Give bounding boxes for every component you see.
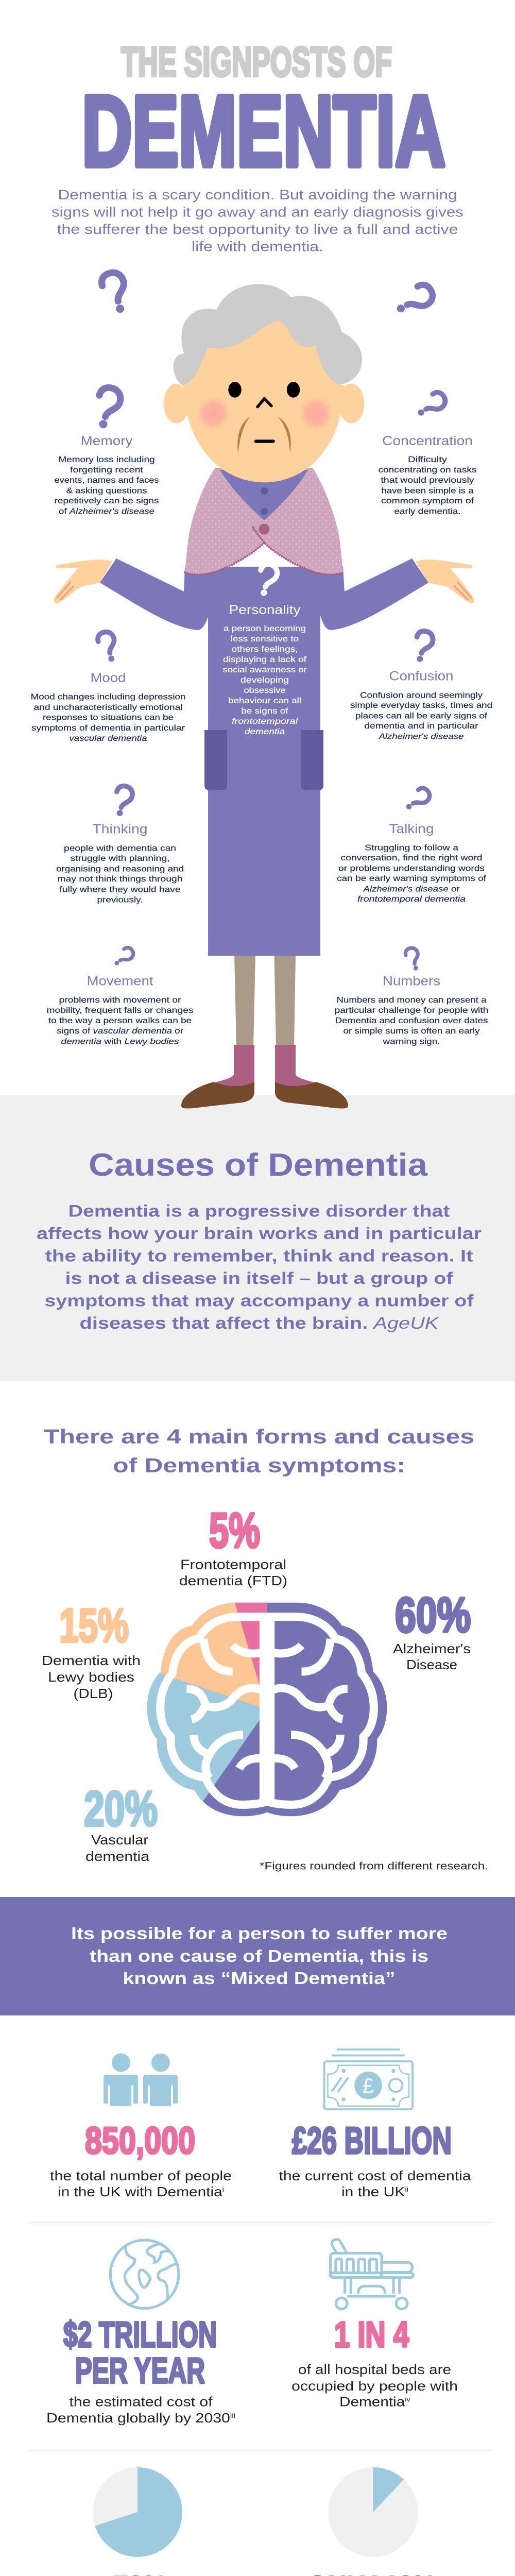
stat: 20 percent vascular: Vascular <box>91 1832 148 1848</box>
icon: question mark thinking <box>111 784 134 818</box>
footnote: figures rounded: *Figures rounded from different research. <box>260 1861 488 1872</box>
text: personality: developing <box>241 676 289 685</box>
text: causes paragraph: Dementia is a progressive disorder that <box>68 1202 450 1221</box>
text: memory: events, names and faces <box>55 476 159 485</box>
dress <box>184 567 345 956</box>
stat: 2 trillion: PER YEAR <box>75 2350 205 2391</box>
stat: 850,000: in the UK with Dementia <box>58 2184 201 2199</box>
stat: 850,000: 850,000 <box>85 2120 195 2162</box>
text: talking: Alzheimer's disease or <box>363 885 460 894</box>
text: numbers: or simple sums is often an early <box>343 1027 480 1036</box>
stat: 5 percent frontotemporal: 5% <box>209 1503 260 1558</box>
stat: 2 trillion: the estimated cost of <box>69 2394 213 2410</box>
stat: 1 in 4: occupied by people with <box>291 2378 458 2394</box>
text: mood: Mood <box>91 671 126 685</box>
text: personality: less sensitive to <box>231 635 299 643</box>
text: thinking: people with dementia can <box>64 844 176 853</box>
left arm <box>100 558 209 630</box>
text: mood <box>31 671 185 743</box>
stat: 2 trillion <box>46 2314 235 2426</box>
stat: 1 in 4: 1 IN 4 <box>334 2314 409 2354</box>
icon: question mark numbers <box>404 946 422 972</box>
heading: 4 main forms <box>44 1426 474 1477</box>
head <box>164 284 364 482</box>
heading: causes of dementia: Causes of Dementia <box>89 1147 428 1183</box>
stat: 15 percent lewy bodies: (DLB) <box>73 1686 113 1701</box>
text: memory: repetitively can be signs <box>55 497 159 505</box>
icon: question mark memory <box>91 385 123 431</box>
text: memory <box>55 434 159 516</box>
icon: question mark mood <box>96 630 119 664</box>
text: thinking: previously. <box>97 896 143 905</box>
stat: 15 percent lewy bodies <box>42 1599 141 1701</box>
stat: 26 billion: £26 BILLION <box>292 2120 452 2162</box>
text: personality: social awareness or <box>222 666 307 674</box>
chart: pie 70 percent <box>93 2467 182 2557</box>
stat: 60 percent alzheimers: Alzheimer's <box>393 1641 471 1656</box>
text: concentration: Difficulty <box>408 455 447 464</box>
text: personality: behaviour can all <box>228 697 301 705</box>
text: thinking <box>56 822 184 905</box>
stat: 2 trillion: iii <box>230 2412 235 2419</box>
text: personality: a person becoming <box>224 624 306 633</box>
text: mood: symptoms of dementia in particular <box>31 724 185 733</box>
stat: 1 in 4: iv <box>405 2396 411 2403</box>
text: confusion: simple everyday tasks, times and <box>350 701 492 710</box>
text: thinking: fully where they would have <box>60 885 181 894</box>
text: movement: mobility, frequent falls or changes <box>46 1006 194 1015</box>
text: thinking: struggle with planning, <box>70 854 170 863</box>
icon: question mark confusion <box>411 630 435 664</box>
text: movement: Movement <box>87 974 153 988</box>
icon: question mark top left <box>99 270 131 316</box>
text: numbers: Numbers and money can present a <box>337 996 487 1005</box>
cardigan <box>185 468 343 575</box>
text: movement: signs of vascular dementia or <box>57 1027 184 1036</box>
text: concentration: early dementia. <box>394 507 460 516</box>
text: numbers <box>335 974 488 1046</box>
text: personality: Personality <box>229 603 301 617</box>
stat: 5 percent frontotemporal <box>179 1503 287 1588</box>
left hand <box>54 560 112 603</box>
stat: 2 trillion: $2 TRILLION <box>63 2314 217 2354</box>
stat: 15 percent lewy bodies: 15% <box>59 1599 129 1652</box>
stat: 5 percent frontotemporal: Frontotemporal <box>180 1557 286 1572</box>
stat: 26 billion: the current cost of dementia <box>279 2168 471 2183</box>
text: personality: obsessive <box>244 686 286 695</box>
text: concentration: that would previously <box>381 476 474 485</box>
panel: causes of dementia <box>0 1095 515 1381</box>
text: numbers: Dementia and confusion over dates <box>335 1016 488 1025</box>
text: talking: Struggling to follow a <box>365 844 458 853</box>
text: personality: be signs of <box>241 707 288 716</box>
panel: mixed dementia: than one cause of Dementia, this is <box>90 1946 428 1965</box>
figure: boots and shoes <box>181 1045 348 1108</box>
text: concentration: Concentration <box>382 434 473 448</box>
icon: question mark top right <box>392 281 436 319</box>
pockets <box>204 730 323 790</box>
icon: globe <box>110 2240 179 2309</box>
text: memory: forgetting recent <box>70 466 144 474</box>
stat: 60 percent alzheimers: Disease <box>406 1657 457 1672</box>
text: memory: of Alzheimer's disease <box>59 507 154 516</box>
text: personality: frontotemporal <box>232 717 298 726</box>
stat: 1 in 4 <box>291 2314 458 2410</box>
text: movement <box>46 974 194 1046</box>
text: talking: conversation, find the right word <box>341 854 482 862</box>
text: numbers: warning sign. <box>382 1038 440 1046</box>
text: memory: Memory loss including <box>59 455 154 464</box>
figure: elderly woman <box>54 284 474 1046</box>
text: mood: and uncharacteristically emotional <box>34 703 182 712</box>
stat: 15 percent lewy bodies: Dementia with <box>42 1653 141 1668</box>
text: causes paragraph <box>37 1202 482 1332</box>
text: talking <box>337 822 487 904</box>
stat: 60 percent alzheimers <box>393 1588 471 1672</box>
text: talking: frontotemporal dementia <box>357 895 466 904</box>
text: confusion: Alzheimer's disease <box>378 733 464 741</box>
text: numbers: particular challenge for people with <box>335 1006 488 1015</box>
text: thinking: organising and reasoning and <box>56 865 184 873</box>
stat: 26 billion <box>279 2120 471 2199</box>
text: talking: or problems understanding words <box>338 865 485 873</box>
panel: mixed dementia <box>0 1897 515 2015</box>
icon: banknote <box>324 2049 413 2109</box>
text: concentration <box>378 434 477 516</box>
panel: mixed dementia: known as “Mixed Dementia” <box>123 1969 396 1988</box>
heading: 4 main forms: There are 4 main forms and causes <box>44 1426 474 1448</box>
icon: question mark concentration <box>414 389 449 420</box>
stat: 1 in 4: Dementia <box>339 2394 397 2410</box>
stat: 2 trillion: Dementia globally by 2030 <box>46 2410 204 2426</box>
heading: 4 main forms: of Dementia symptoms: <box>113 1455 405 1477</box>
chart: brain pie <box>147 1602 387 1817</box>
stat: 26 billion: in the UK <box>341 2184 397 2199</box>
icon: two people <box>104 2054 178 2106</box>
stat: 20 percent vascular <box>84 1782 158 1864</box>
stat: 850,000: the total number of people <box>50 2168 232 2183</box>
icon: hospital bed <box>331 2239 413 2309</box>
text: thinking: may not think things through <box>58 875 182 884</box>
buttons <box>259 487 270 535</box>
text: memory: & asking questions <box>66 486 147 496</box>
text: concentration: common symptom of <box>381 497 474 505</box>
legs <box>234 956 296 1046</box>
right hand <box>416 560 474 603</box>
stat: 5 percent frontotemporal: dementia (FTD) <box>179 1573 287 1588</box>
text: numbers: Numbers <box>383 974 440 988</box>
text: movement: to the way a person walks can be <box>48 1016 192 1025</box>
stat: 1 in 4: of all hospital beds are <box>298 2362 451 2377</box>
text: confusion: Confusion around seemingly <box>360 691 483 700</box>
intro text: Dementia is a scary condition. But avoiding the warning <box>58 187 457 202</box>
collar <box>220 470 308 520</box>
intro text <box>52 187 464 255</box>
text: confusion: places can all be early signs of <box>355 712 488 720</box>
text: personality: others feelings, <box>232 645 298 654</box>
title <box>82 39 445 188</box>
stat: 850,000 <box>50 2120 232 2199</box>
stat: 15 percent lewy bodies: Lewy bodies <box>48 1669 134 1685</box>
text: talking: can be early warning symptoms of <box>337 874 487 883</box>
text: concentration: have been simple is a <box>381 486 474 496</box>
text: causes paragraph: symptoms that may accompany a number of <box>44 1292 474 1310</box>
intro text: signs will not help it go away and an early diagnosis gives <box>52 204 464 219</box>
text: concentration: concentrating on tasks <box>378 466 477 474</box>
icon: banknote: £ <box>363 2074 374 2097</box>
stat: 20 percent vascular: 20% <box>84 1782 158 1836</box>
icon: question mark personality <box>254 563 279 598</box>
text: mood: responses to situations can be <box>43 713 174 722</box>
right arm <box>320 558 428 630</box>
text: causes paragraph: is not a disease in itself – but a group of <box>65 1269 453 1287</box>
text: memory: Memory <box>80 434 133 448</box>
text: mood: Mood changes including depression <box>31 692 185 702</box>
panel: mixed dementia: Its possible for a person to suffer more <box>71 1924 448 1943</box>
text: personality <box>222 603 307 736</box>
stat: 60 percent alzheimers: 60% <box>395 1588 471 1642</box>
intro text: life with dementia. <box>192 239 323 255</box>
icon: question mark movement <box>111 945 136 969</box>
text: personality: displaying a lack of <box>223 655 307 664</box>
text: talking: Talking <box>389 822 434 836</box>
text: movement: problems with movement or <box>59 996 181 1005</box>
icon: question mark talking <box>402 786 433 814</box>
text: causes paragraph: diseases that affect the brain. AgeUK <box>79 1314 440 1332</box>
text: thinking: Thinking <box>93 822 147 837</box>
text: confusion <box>350 669 492 741</box>
stat: 26 billion: ii <box>405 2185 408 2193</box>
text: causes paragraph: affects how your brain works and in particular <box>37 1224 482 1243</box>
text: causes paragraph: the ability to remember, think and reason. It <box>45 1247 473 1265</box>
text: personality: dementia <box>245 727 285 736</box>
text: confusion: dementia and in particular <box>365 722 478 731</box>
intro text: the sufferer the best opportunity to live a full and active <box>57 222 458 237</box>
stat: 20 percent vascular: dementia <box>85 1849 150 1864</box>
chart: pie 12 percent <box>329 2467 418 2557</box>
text: mood: vascular dementia <box>69 734 147 743</box>
stat: 850,000: i <box>222 2185 224 2193</box>
text: confusion: Confusion <box>389 669 453 683</box>
text: movement: dementia with Lewy bodies <box>61 1038 179 1046</box>
